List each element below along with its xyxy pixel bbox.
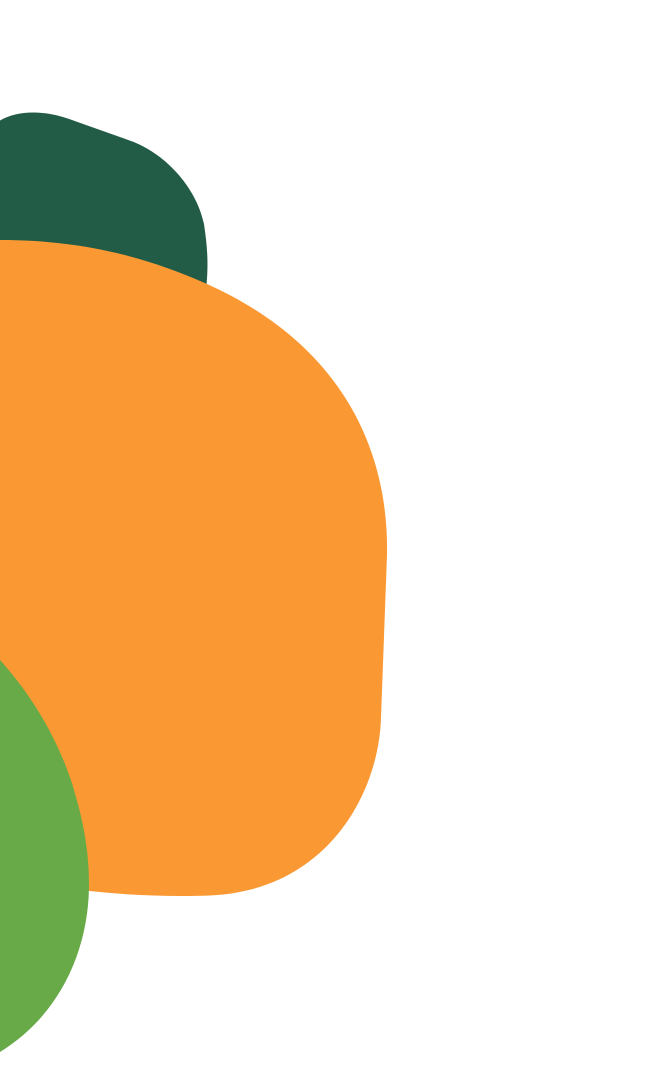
shape: dark green blob — [0, 113, 207, 300]
shape: orange blob — [0, 240, 387, 896]
shape: light green blob — [0, 660, 89, 1052]
